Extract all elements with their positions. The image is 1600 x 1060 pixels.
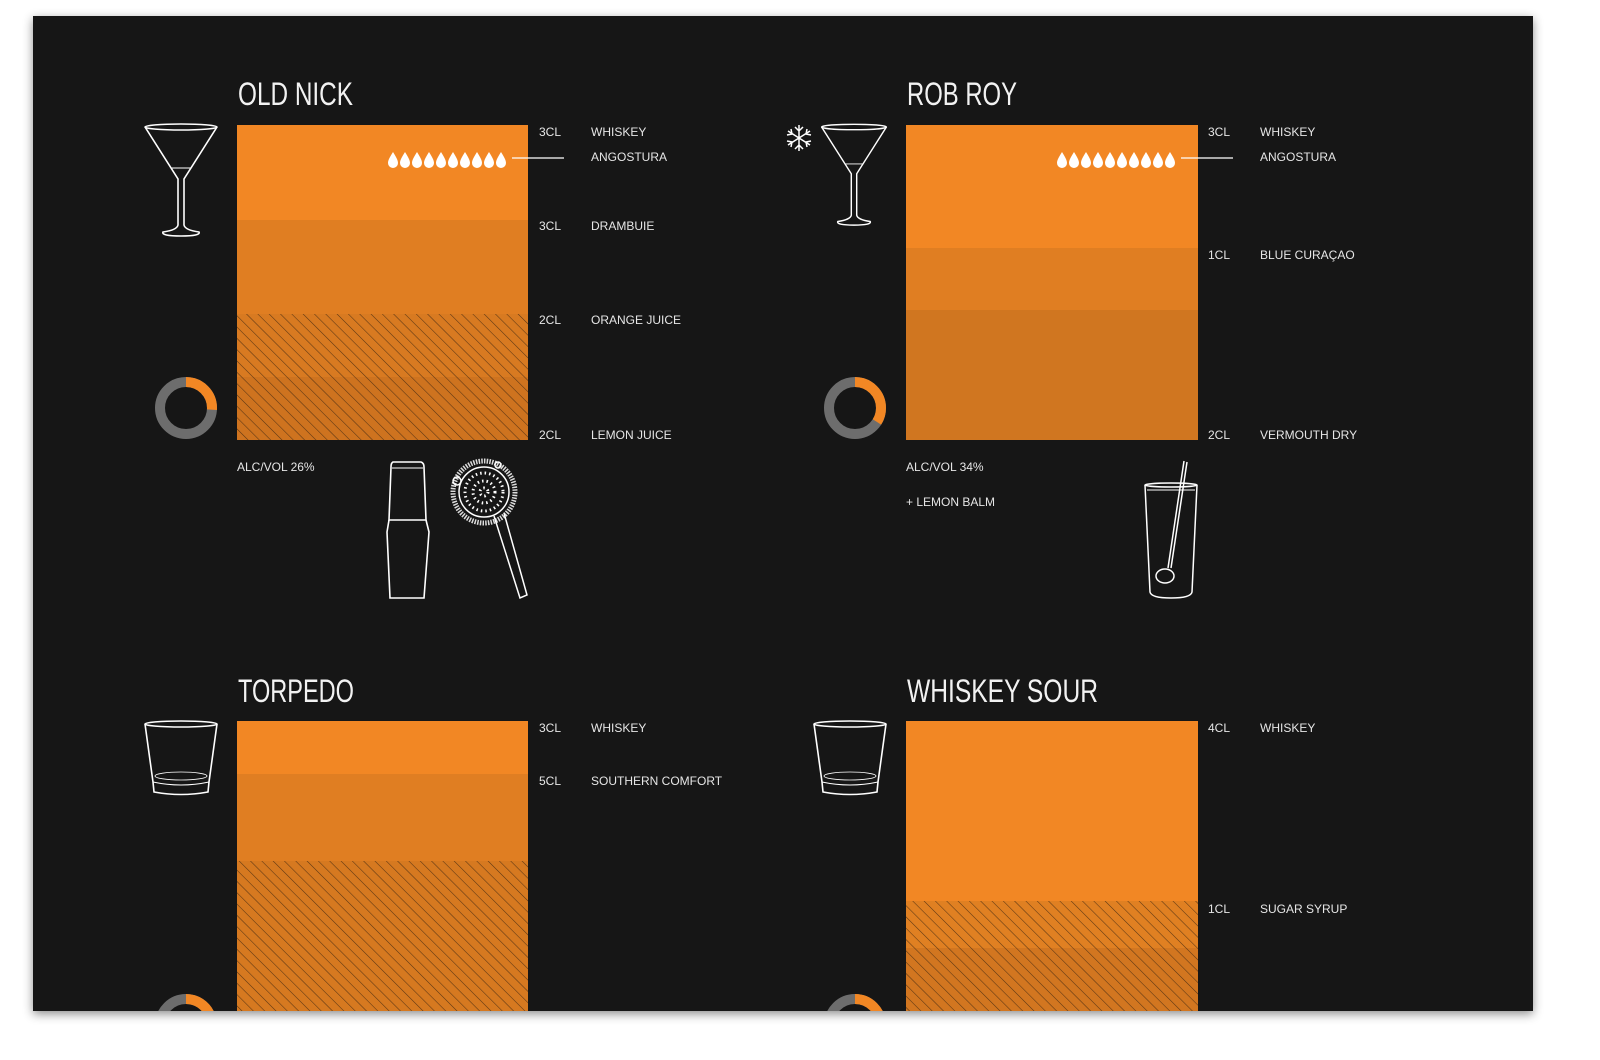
icon: rocks glass [145, 721, 217, 794]
donut: 34% [829, 382, 881, 434]
icon: snowflake [787, 125, 811, 151]
icon: highball with spoon [1145, 461, 1197, 598]
note: lemon balm: + LEMON BALM [906, 495, 995, 509]
ingredient labels: WHISKEY [591, 125, 646, 139]
title: old nick: OLD NICK [238, 76, 353, 112]
ingredient labels: ORANGE JUICE [591, 313, 681, 327]
ingredient labels: WHISKEY [591, 721, 646, 735]
ingredient labels: 2CL [539, 428, 561, 442]
ingredient labels: ANGOSTURA [1260, 150, 1336, 164]
ingredient labels [539, 721, 723, 788]
panel: rob roy [787, 76, 1357, 598]
panel: old nick [145, 76, 681, 598]
ingredient labels: 1CL [1208, 248, 1230, 262]
title: rob roy: ROB ROY [907, 76, 1017, 112]
layered bar: old nick [237, 125, 528, 440]
title: whiskey sour: WHISKEY SOUR [907, 673, 1098, 709]
ingredient labels: WHISKEY [1260, 721, 1315, 735]
ingredient labels: SOUTHERN COMFORT [591, 774, 723, 788]
ingredient labels: BLUE CURAÇAO [1260, 248, 1355, 262]
connector line [512, 157, 564, 159]
title: torpedo: TORPEDO [238, 673, 354, 709]
ingredient labels: DRAMBUIE [591, 219, 654, 233]
layered bar: whiskey sour [906, 721, 1198, 1021]
panel: torpedo [144, 679, 722, 1011]
donut: 26% [160, 382, 212, 434]
abv text: ALC/VOL 34% [906, 460, 984, 474]
ingredient labels: 3CL [539, 219, 561, 233]
donut: whiskey sour [827, 994, 883, 1011]
layered bar: torpedo [237, 721, 528, 1021]
icon: rocks glass [814, 721, 886, 794]
ingredient labels: WHISKEY [1260, 125, 1315, 139]
ingredient labels [1208, 721, 1347, 916]
icon: strainer [453, 461, 527, 598]
connector line [1181, 157, 1233, 159]
ingredient labels: 2CL [1208, 428, 1230, 442]
ingredient labels: 2CL [539, 313, 561, 327]
ingredient labels: VERMOUTH DRY [1260, 428, 1357, 442]
icon: martini glass [822, 124, 886, 225]
ingredient labels: 3CL [539, 721, 561, 735]
donut: torpedo [158, 994, 214, 1011]
abv text: ALC/VOL 26% [237, 460, 315, 474]
ingredient labels: 3CL [539, 125, 561, 139]
ingredient labels: 3CL [1208, 125, 1230, 139]
ingredient labels [539, 125, 681, 442]
layered bar: rob roy [906, 125, 1198, 440]
ingredient labels: LEMON JUICE [591, 428, 672, 442]
icon: martini glass [145, 124, 217, 236]
ingredient labels [1208, 125, 1357, 442]
icon: shaker [387, 462, 429, 598]
ingredient labels: 4CL [1208, 721, 1230, 735]
ingredient labels: SUGAR SYRUP [1260, 902, 1347, 916]
panel: whiskey sour [813, 679, 1347, 1011]
ingredient labels: ANGOSTURA [591, 150, 667, 164]
ingredient labels: 5CL [539, 774, 561, 788]
ingredient labels: 1CL [1208, 902, 1230, 916]
